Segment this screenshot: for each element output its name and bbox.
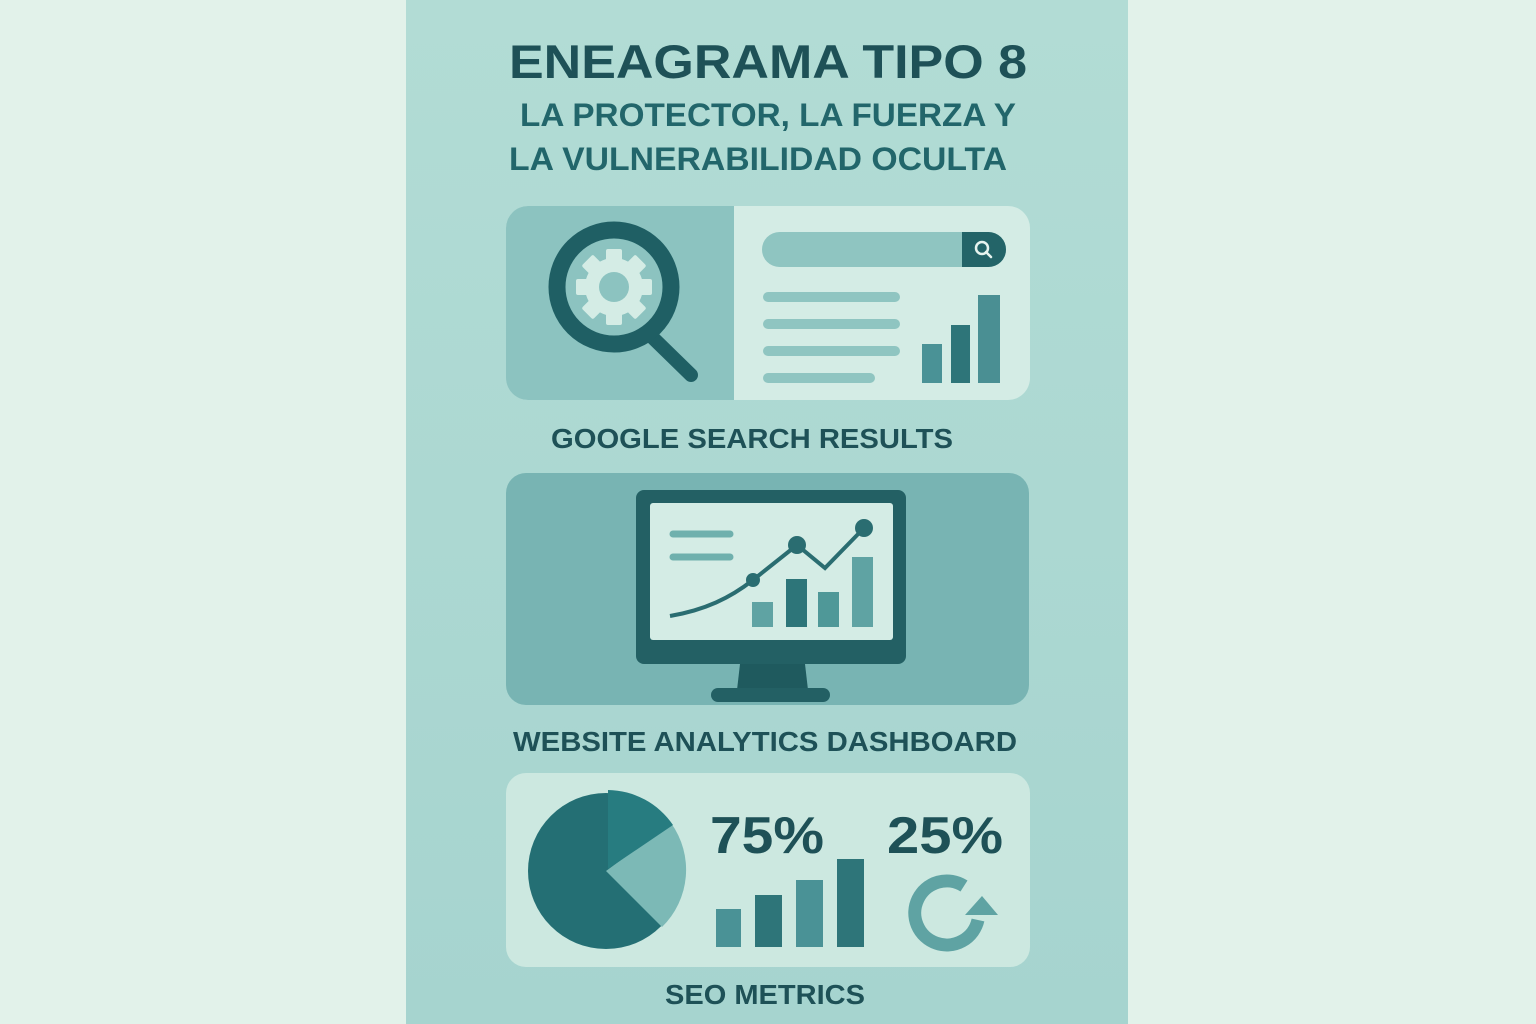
heading: seo metrics: SEO METRICS xyxy=(665,979,865,1010)
panel: seo metrics xyxy=(506,773,1030,967)
heading: website analytics dashboard: WEBSITE ANALYTICS DASHBOARD xyxy=(513,726,1017,757)
heading: google search results: GOOGLE SEARCH RESULTS xyxy=(551,423,953,454)
icon: magnifier with gear xyxy=(557,230,691,375)
pie chart xyxy=(528,790,686,949)
icon: monitor xyxy=(636,490,906,702)
panel: google search results xyxy=(506,206,1030,400)
center column background xyxy=(406,0,1128,1024)
title: ENEAGRAMA TIPO 8 xyxy=(509,35,1027,88)
title: LA VULNERABILIDAD OCULTA xyxy=(509,141,1007,177)
bar chart xyxy=(716,859,864,947)
search bar xyxy=(762,232,1006,267)
result lines xyxy=(768,297,895,378)
stat: 75%: 75% xyxy=(710,807,824,865)
bar chart xyxy=(922,295,1000,383)
title: LA PROTECTOR, LA FUERZA Y xyxy=(520,97,1016,133)
panel: website analytics dashboard xyxy=(506,473,1029,705)
stat: 25%: 25% xyxy=(887,807,1003,865)
title xyxy=(509,35,1027,177)
icon: refresh arrow xyxy=(915,881,998,945)
